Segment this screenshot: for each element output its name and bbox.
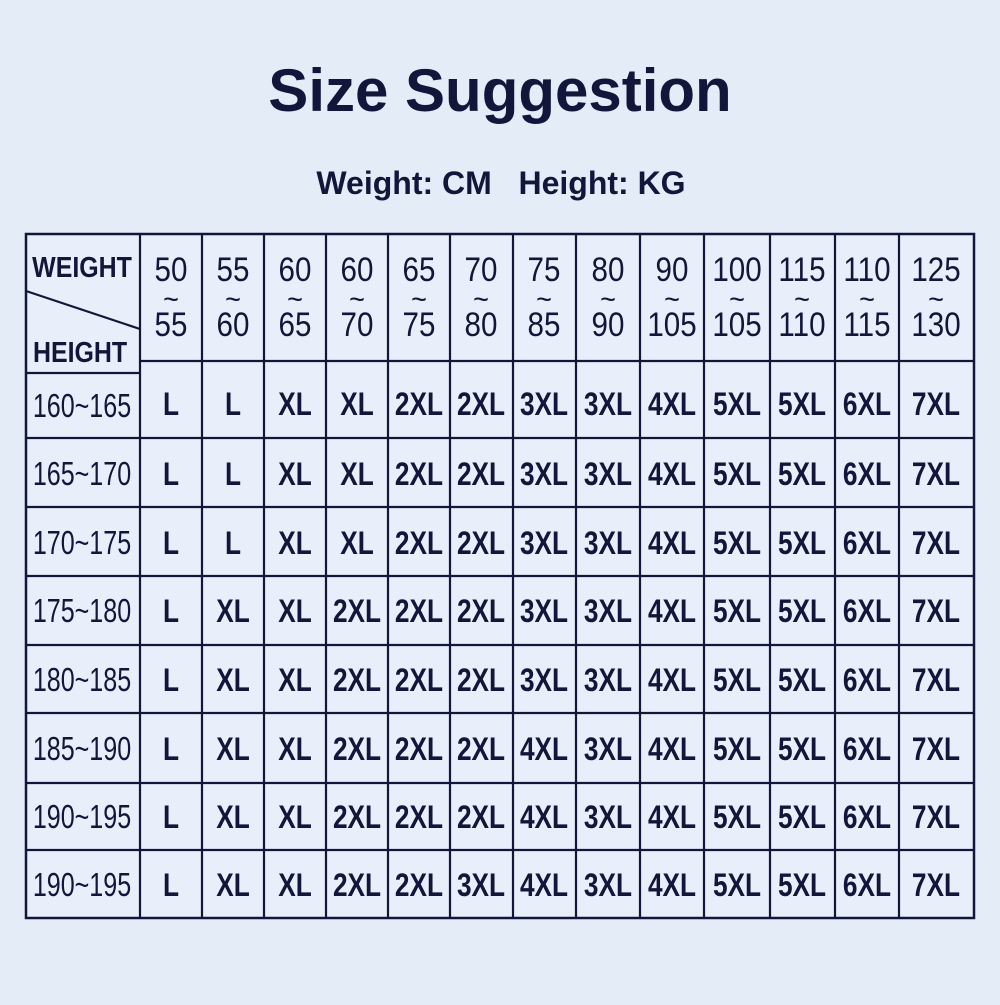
height labels: 165~170 [33,456,131,493]
height labels: 160~165 [33,388,131,425]
size cells: L [225,527,241,562]
weight headers: 50 [155,250,187,288]
weight headers: ~ [928,283,944,316]
size cells: 6XL [843,733,891,768]
weight headers: 75 [528,250,560,288]
size cells: 2XL [395,733,443,768]
weight headers: 85 [528,305,560,343]
size cells: 5XL [713,388,761,423]
size cells: XL [278,869,312,904]
size cells: 3XL [584,388,632,423]
size cells: 4XL [648,458,696,493]
height labels: 170~175 [33,525,131,562]
size cells: L [225,458,241,493]
size cells: 6XL [843,595,891,630]
size cells: 3XL [584,869,632,904]
size cells: 2XL [457,388,505,423]
weight headers: 55 [217,250,249,288]
size cells: 2XL [457,801,505,836]
height labels: 190~195 [33,799,131,836]
weight headers: 55 [155,305,187,343]
size cells: 3XL [520,595,568,630]
size cells: 3XL [520,664,568,699]
size cells: 3XL [520,527,568,562]
size cells: 3XL [520,388,568,423]
size cells: L [225,388,241,423]
size cells: 4XL [648,733,696,768]
size cells: 2XL [457,458,505,493]
size cells: 7XL [912,595,960,630]
size cells: 5XL [713,869,761,904]
weight headers: 110 [843,250,891,288]
size cells: 2XL [395,595,443,630]
size cells: XL [278,595,312,630]
weight headers: ~ [664,283,680,316]
size cells: XL [216,664,250,699]
height labels: 190~195 [33,867,131,904]
size cells: L [163,388,179,423]
header corner: HEIGHT [33,336,128,368]
size table [26,234,974,918]
size cells: 2XL [333,595,381,630]
size cells: 2XL [333,733,381,768]
size cells: 2XL [395,869,443,904]
size cells: 7XL [912,388,960,423]
size cells: XL [216,595,250,630]
size cells: XL [340,458,374,493]
size cells: XL [340,388,374,423]
size cells: 2XL [457,527,505,562]
size cells: XL [278,733,312,768]
weight headers: 60 [279,250,311,288]
size cells: L [163,801,179,836]
weight headers: ~ [473,283,489,316]
size cells: 3XL [457,869,505,904]
weight headers: 60 [217,305,249,343]
size cells: 5XL [713,527,761,562]
size cells: 5XL [778,388,826,423]
size cells: 6XL [843,458,891,493]
weight headers: 90 [592,305,624,343]
height labels: 185~190 [33,731,131,768]
size cells: 2XL [395,458,443,493]
weight headers: 110 [778,305,826,343]
size cells: 6XL [843,527,891,562]
size cells: 4XL [648,527,696,562]
size cells: 4XL [648,664,696,699]
size cells: 4XL [648,869,696,904]
size cells: 3XL [584,664,632,699]
height labels: 175~180 [33,593,131,630]
size cells: 7XL [912,733,960,768]
size cells: 6XL [843,388,891,423]
size cells: 3XL [584,801,632,836]
size cells: 4XL [520,733,568,768]
size cells: 6XL [843,664,891,699]
size cells: 2XL [333,801,381,836]
size cells: 3XL [584,527,632,562]
weight headers: 80 [592,250,624,288]
size cells: XL [278,527,312,562]
weight headers: ~ [411,283,427,316]
size cells: 3XL [520,458,568,493]
weight headers: ~ [794,283,810,316]
title: Size Suggestion [268,57,732,124]
size cells: 5XL [778,664,826,699]
size cells: L [163,458,179,493]
size cells: XL [340,527,374,562]
weight headers: 60 [341,250,373,288]
size cells: 5XL [778,801,826,836]
size cells: XL [216,733,250,768]
size cells: 3XL [584,458,632,493]
size cells: 5XL [778,527,826,562]
weight headers: 70 [465,250,497,288]
size cells: 4XL [520,801,568,836]
size cells: 6XL [843,801,891,836]
size cells: L [163,733,179,768]
weight headers: 115 [778,250,826,288]
weight headers: 105 [712,305,762,343]
subtitle: Weight: CM Height: KG [316,165,686,201]
size cells: 5XL [778,869,826,904]
weight headers: 115 [843,305,891,343]
weight headers: 100 [712,250,762,288]
size cells: 5XL [713,664,761,699]
header corner: WEIGHT [32,251,132,283]
weight headers: ~ [349,283,365,316]
weight headers: ~ [600,283,616,316]
size cells: 2XL [333,664,381,699]
size cells: 2XL [457,733,505,768]
size cells: 5XL [713,733,761,768]
size cells: XL [216,801,250,836]
weight headers: 65 [403,250,435,288]
size cells: 5XL [713,801,761,836]
weight headers: ~ [536,283,552,316]
weight headers: ~ [729,283,745,316]
weight headers: 90 [656,250,688,288]
weight headers: 75 [403,305,435,343]
size cells: 5XL [778,733,826,768]
weight headers: 70 [341,305,373,343]
header corner [32,251,132,368]
size cells: 5XL [778,458,826,493]
size cells: 2XL [395,388,443,423]
size cells: L [163,527,179,562]
weight headers: 65 [279,305,311,343]
size cells: 5XL [778,595,826,630]
size cells: 3XL [584,595,632,630]
size cells: 5XL [713,458,761,493]
height labels: 180~185 [33,662,131,699]
size cells: 4XL [648,595,696,630]
size cells: 2XL [395,527,443,562]
size cells: 2XL [333,869,381,904]
size cells: 7XL [912,869,960,904]
size cells: 7XL [912,527,960,562]
weight headers: 105 [647,305,697,343]
size cells: 6XL [843,869,891,904]
size cells: 2XL [395,664,443,699]
size cells: 2XL [457,595,505,630]
weight headers: 130 [911,305,961,343]
weight headers [155,250,961,343]
size cells: 4XL [648,801,696,836]
weight headers: ~ [225,283,241,316]
size cells: 4XL [520,869,568,904]
size cells: 7XL [912,664,960,699]
size cells: 7XL [912,801,960,836]
size cells: XL [216,869,250,904]
size cells: XL [278,664,312,699]
weight headers: 80 [465,305,497,343]
size cells: 7XL [912,458,960,493]
size cells: 5XL [713,595,761,630]
size cells: L [163,869,179,904]
size cells: L [163,595,179,630]
size cells: L [163,664,179,699]
size cells: 4XL [648,388,696,423]
size cells: XL [278,388,312,423]
height labels [33,388,131,904]
size cells: XL [278,801,312,836]
size cells: 2XL [395,801,443,836]
weight headers: ~ [163,283,179,316]
size cells: XL [278,458,312,493]
weight headers: ~ [859,283,875,316]
size cells: 3XL [584,733,632,768]
weight headers: 125 [911,250,961,288]
size cells [163,388,960,904]
size cells: 2XL [457,664,505,699]
weight headers: ~ [287,283,303,316]
